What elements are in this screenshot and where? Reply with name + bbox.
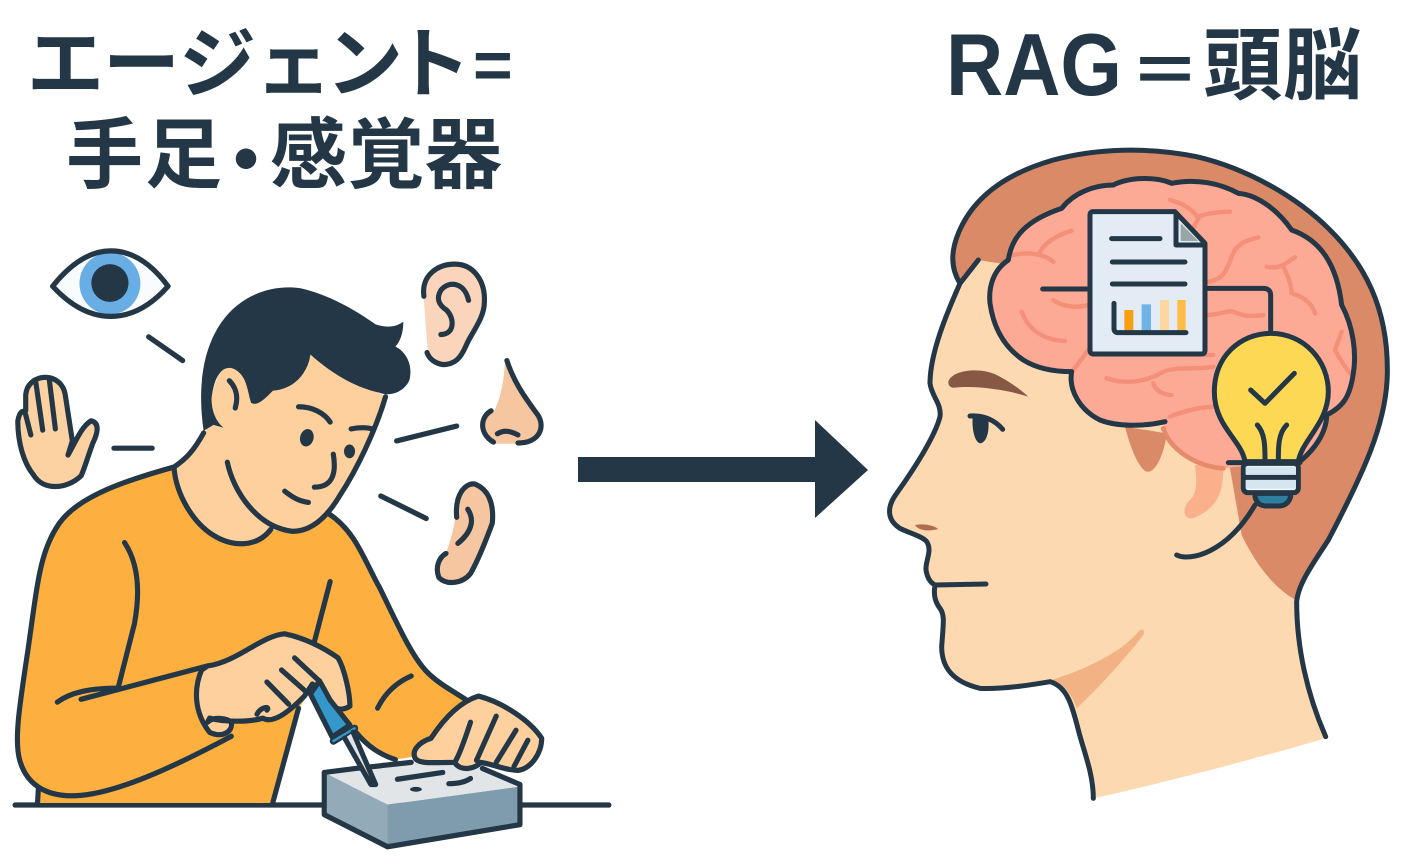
icon: light bulb bbox=[1214, 333, 1328, 506]
arrow bbox=[578, 420, 868, 518]
hair bbox=[953, 150, 1387, 602]
table bbox=[15, 798, 609, 811]
hair bbox=[201, 287, 410, 431]
title: agent bbox=[27, 3, 513, 213]
sense connector lines bbox=[114, 337, 457, 518]
title: RAG: RAG bbox=[946, 15, 1122, 114]
icon: hand bbox=[18, 377, 97, 487]
hair front edge and head outline bbox=[890, 150, 1387, 798]
brain stem bbox=[1185, 465, 1223, 518]
head and neck bbox=[174, 355, 386, 544]
title: agent: 手足 bbox=[66, 94, 222, 205]
icon: ear lower bbox=[437, 484, 493, 583]
title: RAG: ＝ bbox=[1130, 16, 1200, 117]
pressing hand bbox=[414, 696, 542, 770]
eyebrow bbox=[948, 370, 1028, 397]
eye bbox=[970, 416, 1003, 443]
title: agent: ・ bbox=[206, 97, 286, 213]
connector lines bbox=[1043, 288, 1271, 333]
illustration: head with brain bbox=[890, 150, 1387, 798]
device box bbox=[324, 732, 520, 847]
sweater bbox=[17, 467, 467, 803]
nostril bbox=[915, 524, 938, 530]
eyes bbox=[298, 427, 355, 458]
title: agent: 感覚器 bbox=[270, 94, 502, 205]
icon: ear upper bbox=[424, 264, 484, 365]
neck shadow bbox=[1052, 630, 1144, 708]
icon: nose bbox=[483, 361, 541, 444]
head outlines bbox=[17, 381, 467, 803]
screwdriver bbox=[310, 681, 355, 741]
title: agent: エージェント bbox=[27, 3, 471, 114]
title: agent: = bbox=[473, 27, 513, 103]
title: RAG bbox=[946, 1, 1362, 117]
icon: eye bbox=[53, 251, 168, 316]
brain bbox=[990, 179, 1355, 468]
under-brain shadow bbox=[1125, 427, 1167, 472]
hand holding screwdriver bbox=[196, 634, 350, 735]
illustration: person with senses bbox=[15, 251, 609, 847]
icon: document bbox=[1090, 212, 1205, 354]
title: RAG: 頭脳 bbox=[1203, 1, 1362, 116]
face and neck bbox=[890, 260, 1325, 798]
